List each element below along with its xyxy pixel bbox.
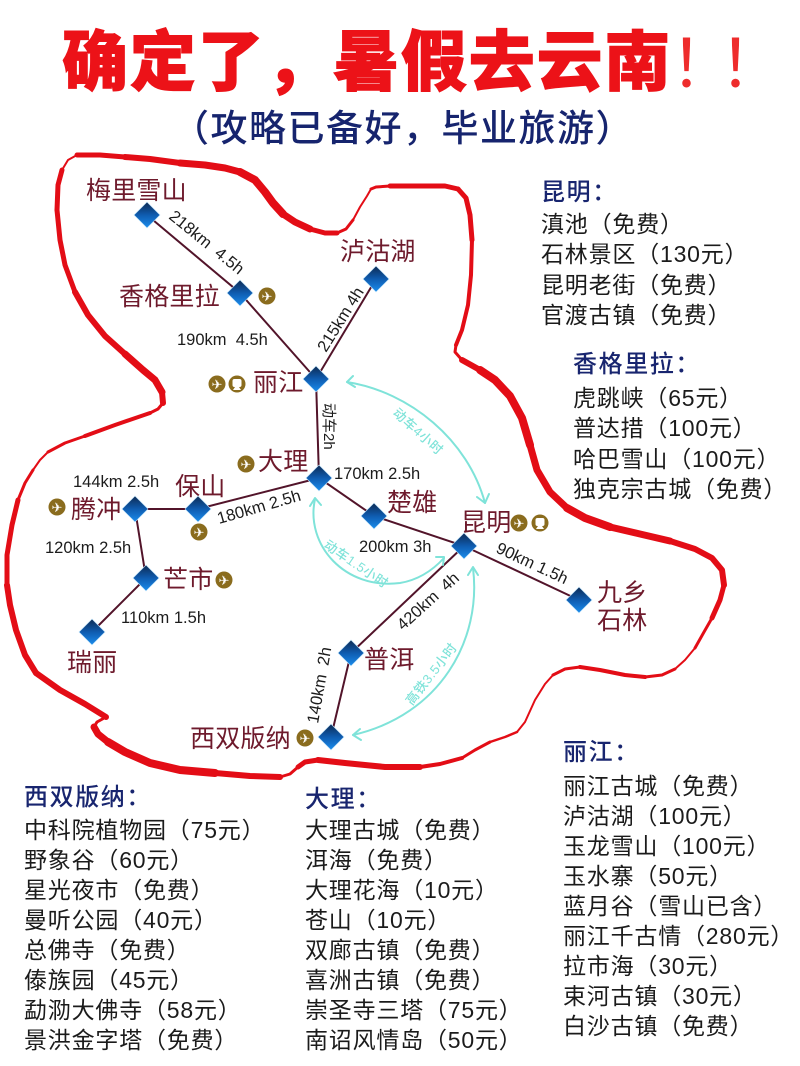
- distance labels: 120km 2.5h: [45, 539, 131, 557]
- city names: 丽江: [253, 369, 303, 397]
- distance labels: [45, 207, 571, 725]
- list: Lijiang: 丽江千古情（280元）: [563, 923, 794, 949]
- routes: [92, 215, 579, 737]
- city names: 大理: [258, 448, 308, 476]
- transport icons: ✈: [241, 457, 252, 472]
- list: Shangri-La: 哈巴雪山（100元）: [573, 446, 780, 472]
- transport icons: ✈: [514, 516, 525, 531]
- list: Xishuangbanna: 中科院植物园（75元）: [24, 817, 265, 843]
- distance labels: 218km 4.5h: [165, 207, 247, 278]
- transport icons: ✈: [219, 573, 230, 588]
- distance labels: 动车2h: [320, 403, 337, 450]
- transport icons: ✈: [262, 289, 273, 304]
- province outline: [7, 155, 724, 777]
- distance labels: 140km 2h: [304, 646, 335, 725]
- distance labels: 180km 2.5h: [215, 487, 303, 528]
- list: Dali: 大理：: [305, 786, 382, 813]
- list: Lijiang: 玉水寨（50元）: [563, 863, 733, 889]
- city names: 西双版纳: [190, 725, 291, 753]
- transport icons: ✈: [52, 500, 63, 515]
- city names: 保山: [175, 473, 225, 501]
- list: Lijiang: [563, 739, 794, 1039]
- list: Xishuangbanna: [24, 784, 265, 1053]
- list: Lijiang: 玉龙雪山（100元）: [563, 833, 770, 859]
- distance labels: 110km 1.5h: [121, 609, 206, 627]
- list: Dali: 双廊古镇（免费）: [305, 937, 495, 963]
- list: Shangri-La: 普达措（100元）: [573, 415, 757, 441]
- city names: 楚雄: [387, 489, 437, 517]
- high-speed rail arcs: [310, 376, 489, 740]
- station markers: [79, 202, 592, 750]
- list: Dali: 崇圣寺三塔（75元）: [305, 997, 523, 1023]
- title: 确定了，暑假去云南: [62, 25, 672, 99]
- city names: 梅里雪山: [86, 177, 187, 205]
- city names: 泸沽湖: [340, 238, 416, 266]
- list: Xishuangbanna: 总佛寺（免费）: [24, 937, 191, 963]
- subtitle: （攻略已备好，毕业旅游）: [172, 108, 634, 149]
- city names: [67, 177, 647, 753]
- transport icons: ✈: [300, 731, 311, 746]
- list: Dali: 大理古城（免费）: [305, 817, 495, 843]
- city names: 香格里拉: [119, 283, 220, 311]
- list: Lijiang: 拉市海（30元）: [563, 953, 733, 979]
- list: Xishuangbanna: 野象谷（60元）: [24, 847, 194, 873]
- list: Kunming: [541, 179, 748, 328]
- list: Lijiang: 白沙古镇（免费）: [563, 1013, 753, 1039]
- list: Kunming: 官渡古镇（免费）: [541, 302, 731, 328]
- rail labels: 高铁3.5小时: [403, 640, 460, 708]
- list: Shangri-La: 香格里拉：: [573, 351, 701, 378]
- distance labels: 170km 2.5h: [334, 465, 420, 483]
- list: Xishuangbanna: 西双版纳：: [24, 784, 152, 811]
- list: Kunming: 滇池（免费）: [541, 210, 684, 236]
- city names: 普洱: [364, 646, 414, 674]
- distance labels: 190km 4.5h: [177, 331, 268, 349]
- list: Lijiang: 泸沽湖（100元）: [563, 803, 747, 829]
- city names: 腾冲: [71, 496, 121, 524]
- rail labels: 动车1.5小时: [321, 537, 391, 591]
- list: Xishuangbanna: 傣族园（45元）: [24, 967, 194, 993]
- distance labels: 215km 4h: [314, 284, 368, 355]
- list: Dali: 喜洲古镇（免费）: [305, 967, 495, 993]
- city names: 石林: [597, 607, 647, 635]
- distance labels: 420km 4h: [394, 569, 463, 634]
- city names: 瑞丽: [67, 649, 117, 677]
- list: Lijiang: 丽江古城（免费）: [563, 773, 753, 799]
- list: Kunming: 石林景区（130元）: [541, 241, 748, 267]
- list: Dali: 大理花海（10元）: [305, 877, 499, 903]
- list: Lijiang: 丽江：: [563, 739, 640, 766]
- rail labels: [321, 405, 460, 708]
- city names: 九乡: [597, 579, 647, 607]
- list: Shangri-La: 独克宗古城（免费）: [573, 476, 787, 502]
- transport icons: ✈: [194, 525, 205, 540]
- transport icons: [48, 288, 548, 746]
- distance labels: 90km 1.5h: [493, 539, 571, 588]
- city names: 昆明: [461, 509, 511, 537]
- list: Xishuangbanna: 景洪金字塔（免费）: [24, 1027, 238, 1053]
- list: Dali: 洱海（免费）: [305, 847, 448, 873]
- list: Kunming: 昆明：: [541, 179, 618, 206]
- list: Shangri-La: 虎跳峡（65元）: [573, 384, 743, 410]
- list: Xishuangbanna: 星光夜市（免费）: [24, 877, 214, 903]
- list: Lijiang: 蓝月谷（雪山已含）: [563, 893, 777, 919]
- rail labels: 动车4小时: [390, 405, 446, 458]
- transport icons: ✈: [212, 377, 223, 392]
- list: Shangri-La: [573, 351, 787, 502]
- list: Kunming: 昆明老街（免费）: [541, 272, 731, 298]
- list: Xishuangbanna: 勐泐大佛寺（58元）: [24, 997, 242, 1023]
- list: Dali: [305, 786, 523, 1053]
- list: Dali: 南诏风情岛（50元）: [305, 1027, 523, 1053]
- list: Dali: 苍山（10元）: [305, 907, 451, 933]
- city names: 芒市: [163, 566, 213, 594]
- distance labels: 144km 2.5h: [73, 473, 159, 491]
- list: Xishuangbanna: 曼听公园（40元）: [24, 907, 218, 933]
- distance labels: 200km 3h: [359, 538, 431, 556]
- list: Lijiang: 束河古镇（30元）: [563, 983, 757, 1009]
- title exclamation marks: ！！: [670, 27, 768, 101]
